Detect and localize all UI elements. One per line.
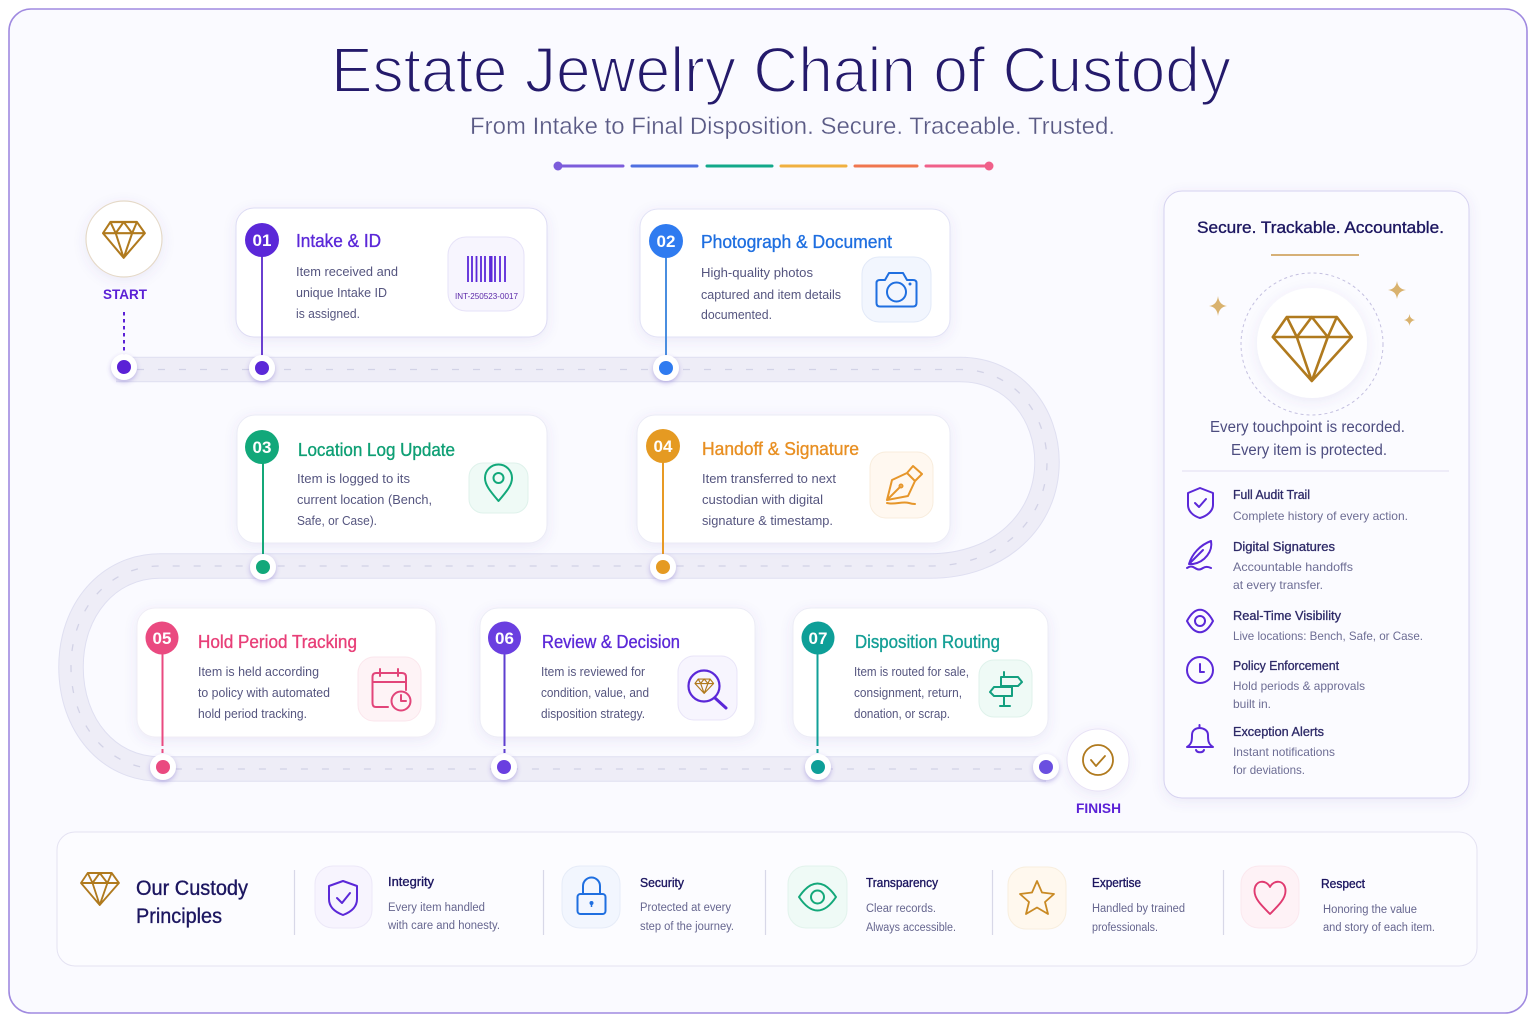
heading 05: Hold Period Tracking — [198, 632, 357, 652]
badge 02: 02 — [657, 232, 675, 251]
icon: barcode: INT-250523-0017 — [455, 291, 518, 301]
card 04 — [637, 415, 950, 558]
icon: signpost — [979, 660, 1032, 717]
text 06: disposition strategy. — [541, 706, 645, 721]
principle: transparency: Transparency — [866, 876, 939, 890]
panel: custody principles — [57, 832, 1477, 966]
badge 03 — [245, 430, 279, 464]
badge 03: 03 — [253, 438, 271, 457]
text 02: documented. — [701, 307, 772, 322]
route nodes — [111, 354, 1059, 780]
feature: exception alerts: for deviations. — [1233, 763, 1305, 777]
principle: transparency: Always accessible. — [866, 922, 956, 934]
icon: principles diamond — [81, 873, 119, 905]
heading 01: Intake & ID — [296, 231, 381, 251]
icon: quill — [1187, 541, 1211, 570]
feature: full audit trail: Full Audit Trail — [1233, 488, 1310, 502]
card 05 — [137, 608, 436, 758]
text 04: custodian with digital — [702, 492, 823, 507]
title: Estate Jewelry Chain of Custody — [331, 34, 1231, 106]
panel statement: Every touchpoint is recorded. — [1210, 419, 1405, 436]
principle: respect: Respect — [1321, 877, 1366, 891]
feature: digital signatures: Digital Signatures — [1233, 540, 1335, 554]
icon: shield — [1188, 488, 1213, 518]
text 05: to policy with automated — [198, 685, 330, 700]
connector 05 — [162, 648, 164, 758]
feature: digital signatures: at every transfer. — [1233, 578, 1323, 592]
connector 06 — [504, 648, 506, 758]
badge 04: 04 — [654, 437, 673, 456]
start dotted connector — [123, 312, 125, 356]
badge 01 — [245, 223, 279, 257]
feature: full audit trail — [1188, 488, 1408, 523]
text 04 — [702, 471, 836, 528]
principle: expertise: professionals. — [1092, 922, 1158, 934]
winding custody road — [71, 370, 1047, 769]
text 01: is assigned. — [296, 306, 360, 321]
text 07: Item is routed for sale, — [854, 664, 969, 679]
heading 02: Photograph & Document — [701, 232, 892, 252]
principle: respect: and story of each item. — [1323, 922, 1435, 934]
card 07 — [793, 608, 1048, 758]
badge 07 — [802, 622, 834, 654]
principle: transparency — [788, 866, 956, 934]
principle: security: Security — [640, 876, 685, 890]
principles heading: Our Custody — [136, 877, 248, 900]
heading 06: Review & Decision — [542, 632, 680, 652]
panel statement — [1210, 419, 1405, 459]
principle: respect: Honoring the value — [1323, 904, 1417, 916]
badge 04 — [646, 429, 680, 463]
icon: finish check — [1083, 745, 1113, 775]
principle: integrity: Integrity — [388, 875, 435, 889]
principle: security: step of the journey. — [640, 921, 734, 933]
feature: policy enforcement: built in. — [1233, 697, 1271, 711]
card 02 — [640, 209, 950, 358]
connector 03 — [262, 456, 264, 558]
icon: location pin — [469, 463, 528, 513]
finish marker — [1067, 729, 1129, 816]
connector 04 — [662, 455, 664, 558]
icon: star — [1008, 867, 1066, 929]
feature: policy enforcement: Hold periods & approvals — [1233, 679, 1365, 693]
feature: exception alerts: Instant notifications — [1233, 745, 1335, 759]
feature: exception alerts — [1187, 725, 1335, 777]
feature: digital signatures: Accountable handoffs — [1233, 560, 1353, 574]
text 01: Item received and — [296, 264, 398, 279]
icon: fountain pen — [870, 452, 933, 518]
principles heading — [136, 877, 248, 928]
text 02: captured and item details — [701, 287, 841, 302]
badge 02 — [649, 224, 683, 258]
badge 06 — [488, 622, 521, 654]
text 02: High-quality photos — [701, 265, 813, 280]
principle: expertise: Handled by trained — [1092, 903, 1185, 915]
badge 07: 07 — [809, 629, 827, 648]
principle: security: Protected at every — [640, 902, 731, 914]
text 04: Item transferred to next — [702, 471, 836, 486]
text 03: Safe, or Case). — [297, 513, 377, 528]
text 03 — [297, 471, 432, 528]
text 07: donation, or scrap. — [854, 706, 950, 721]
icon: barcode — [448, 237, 524, 311]
icon: padlock — [562, 866, 620, 928]
feature: real-time visibility: Live locations: Bench, Safe, or Case. — [1233, 629, 1423, 643]
connector 02 — [665, 250, 667, 358]
connector 07 — [816, 648, 818, 758]
text 01 — [296, 264, 398, 321]
text 07 — [854, 664, 969, 721]
feature: digital signatures — [1187, 540, 1353, 592]
card 06 — [480, 608, 755, 758]
panel: secure trackable accountable — [1164, 191, 1469, 798]
text 05: hold period tracking. — [198, 706, 307, 721]
icon: clock — [1187, 657, 1213, 683]
principle: expertise: Expertise — [1092, 876, 1141, 890]
card 01 — [236, 208, 547, 358]
text 05: Item is held according — [198, 664, 319, 679]
subtitle: From Intake to Final Disposition. Secure. Traceable. Trusted. — [470, 113, 1115, 140]
text 06: condition, value, and — [541, 685, 649, 700]
icon: calendar clock — [358, 657, 421, 721]
text 07: consignment, return, — [854, 685, 962, 700]
icon: start diamond — [103, 222, 145, 258]
icon: transparency eye — [788, 866, 847, 928]
principle: integrity: with care and honesty. — [387, 920, 500, 932]
feature: full audit trail: Complete history of every action. — [1233, 509, 1408, 523]
feature: real-time visibility — [1187, 609, 1423, 643]
text 01: unique Intake ID — [296, 285, 387, 300]
heading 07: Disposition Routing — [855, 632, 1000, 652]
badge 05 — [146, 622, 178, 654]
badge 06: 06 — [495, 629, 514, 648]
icon: magnifier diamond — [678, 656, 737, 720]
principle: integrity — [315, 866, 500, 932]
text 03: current location (Bench, — [297, 492, 432, 507]
feature: policy enforcement: Policy Enforcement — [1233, 659, 1340, 673]
feature: real-time visibility: Real-Time Visibility — [1233, 609, 1342, 623]
text 05 — [198, 664, 330, 721]
feature: exception alerts: Exception Alerts — [1233, 725, 1324, 739]
card 03 — [237, 415, 547, 558]
finish label: FINISH — [1076, 800, 1121, 816]
text 04: signature & timestamp. — [702, 513, 833, 528]
icon: integrity shield — [315, 866, 372, 928]
icon: camera — [862, 257, 931, 322]
principle: respect — [1241, 866, 1435, 934]
text 06 — [541, 664, 649, 721]
panel statement: Every item is protected. — [1231, 442, 1387, 459]
gold rule — [1271, 254, 1359, 256]
feature: policy enforcement — [1187, 657, 1365, 711]
text 03: Item is logged to its — [297, 471, 411, 486]
principle: expertise — [1008, 867, 1185, 934]
heading 04: Handoff & Signature — [702, 439, 859, 459]
principle: integrity: Every item handled — [388, 902, 485, 914]
text 02 — [701, 265, 841, 322]
start label: START — [103, 286, 147, 302]
icon: bell — [1187, 725, 1213, 752]
heading 03: Location Log Update — [298, 440, 455, 460]
panel heading: Secure. Trackable. Accountable. — [1197, 218, 1444, 237]
start marker — [86, 201, 162, 356]
principle: security — [562, 866, 734, 933]
principles heading: Principles — [136, 905, 222, 928]
badge 01: 01 — [253, 231, 271, 250]
sparkles — [1209, 281, 1415, 326]
principle: transparency: Clear records. — [866, 903, 936, 915]
emblem: diamond in circle — [1241, 273, 1383, 415]
decorative colour divider — [554, 162, 994, 170]
badge 05: 05 — [153, 629, 171, 648]
connector 01 — [261, 250, 263, 358]
icon: eye — [1187, 610, 1213, 632]
icon: heart — [1241, 866, 1299, 928]
text 06: Item is reviewed for — [541, 664, 646, 679]
